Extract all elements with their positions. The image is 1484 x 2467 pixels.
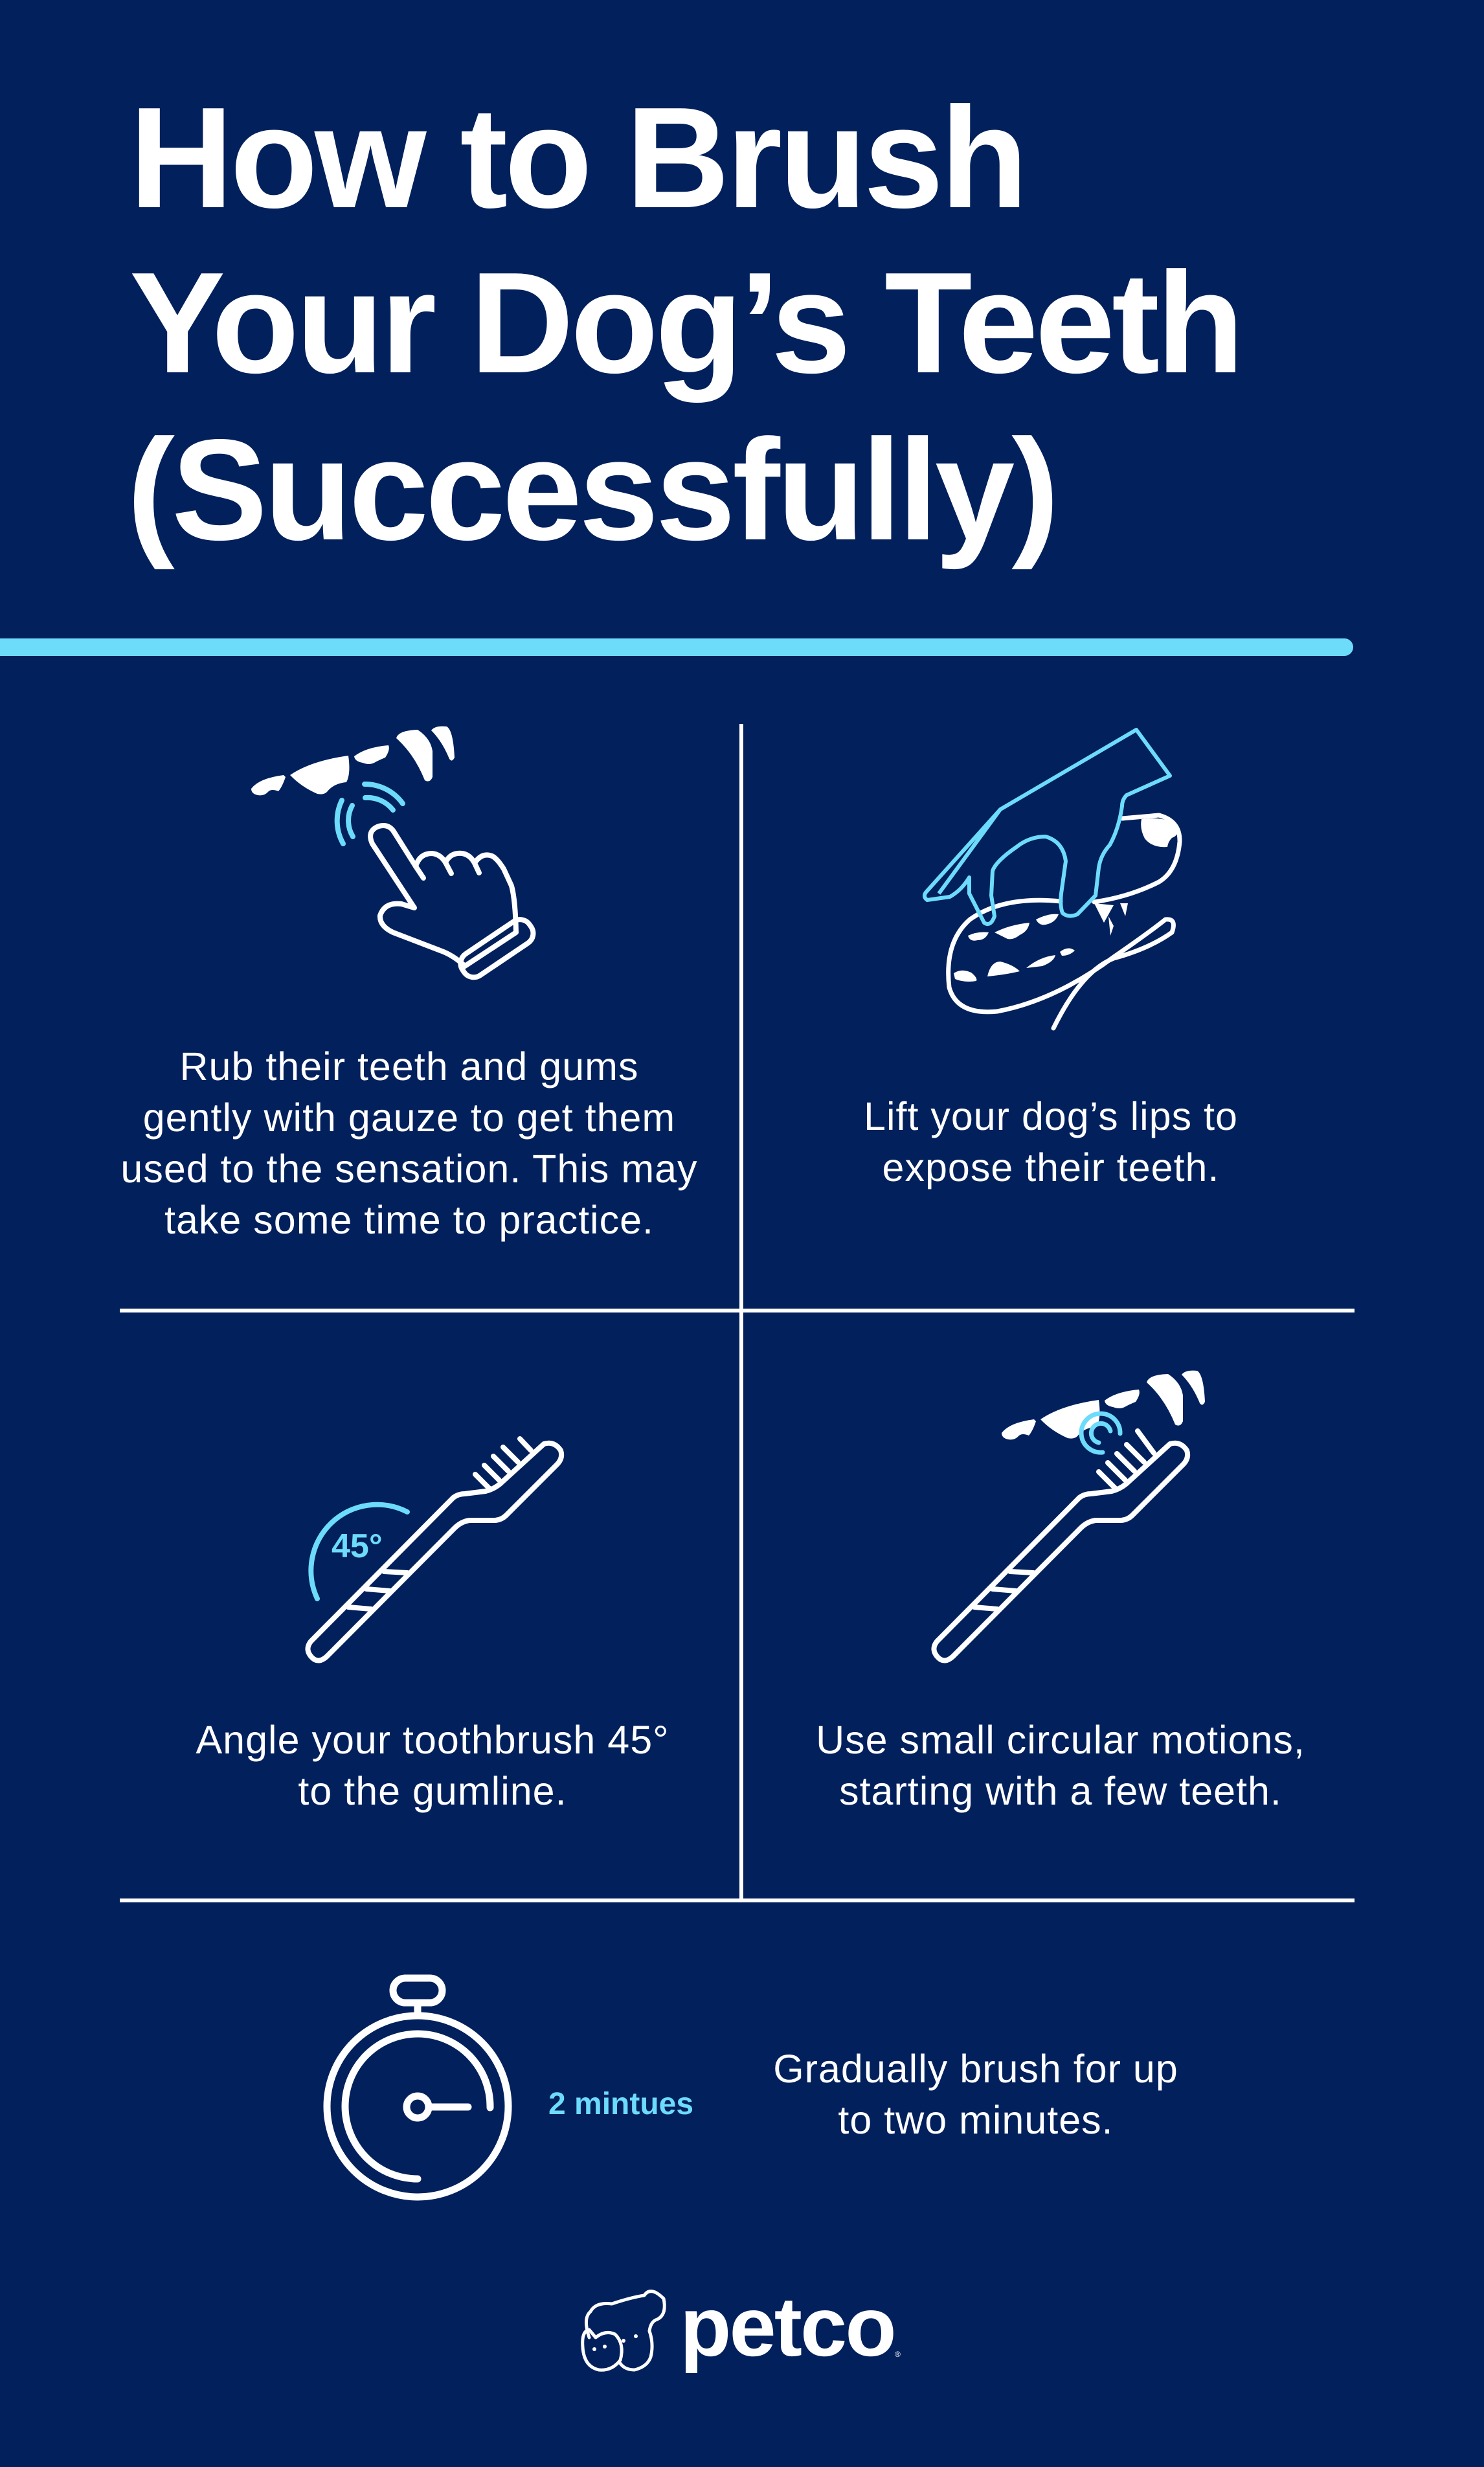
text: lift lips: Lift your dog’s lips to bbox=[864, 1094, 1238, 1138]
text: angle toothbrush bbox=[196, 1718, 669, 1813]
logo: petco bbox=[583, 2279, 901, 2374]
text: rub teeth: take some time to practice. bbox=[164, 1198, 654, 1242]
title: (Successfully) bbox=[127, 410, 1056, 570]
panel: circular motions bbox=[816, 1371, 1305, 1813]
text: lift lips: expose their teeth. bbox=[883, 1145, 1219, 1189]
text: angle toothbrush: to the gumline. bbox=[298, 1769, 567, 1813]
title: How to Brush bbox=[129, 78, 1025, 238]
text: circular motions: starting with a few teeth. bbox=[839, 1769, 1282, 1813]
icon: stopwatch bbox=[327, 1978, 508, 2197]
icon: toothbrush at 45 degrees: 45° bbox=[332, 1527, 383, 1565]
text: rub teeth: gently with gauze to get them bbox=[143, 1096, 675, 1140]
text: circular motions bbox=[816, 1718, 1305, 1813]
text: angle toothbrush: Angle your toothbrush 45° bbox=[196, 1718, 669, 1762]
icon: teeth and pointing hand bbox=[251, 727, 537, 982]
text: two minutes: to two minutes. bbox=[838, 2098, 1114, 2142]
panel: angle toothbrush bbox=[196, 1439, 669, 1813]
text: rub teeth: used to the sensation. This may bbox=[120, 1147, 698, 1191]
accent bar bbox=[0, 638, 1353, 656]
logo: petco: ® bbox=[895, 2350, 901, 2359]
icon: toothbrush with teeth bbox=[934, 1371, 1205, 1661]
label: 2 mintues: 2 mintues bbox=[548, 2087, 693, 2121]
title: Your Dog’s Teeth bbox=[129, 243, 1241, 403]
text: rub teeth bbox=[120, 1044, 698, 1242]
panel: lift lips bbox=[864, 730, 1238, 1189]
text: circular motions: Use small circular motions, bbox=[816, 1718, 1305, 1762]
text: two minutes: Gradually brush for up bbox=[773, 2047, 1178, 2091]
icon: toothbrush at 45 degrees bbox=[308, 1439, 561, 1661]
logo: petco: petco bbox=[680, 2279, 895, 2374]
panel: rub teeth bbox=[120, 727, 698, 1242]
icon: hand lifting lips bbox=[925, 730, 1180, 1028]
panel: two minutes bbox=[327, 1978, 1178, 2197]
text: rub teeth: Rub their teeth and gums bbox=[180, 1044, 638, 1088]
text: lift lips bbox=[864, 1094, 1238, 1189]
text: two minutes bbox=[773, 2047, 1178, 2142]
title bbox=[127, 78, 1241, 570]
